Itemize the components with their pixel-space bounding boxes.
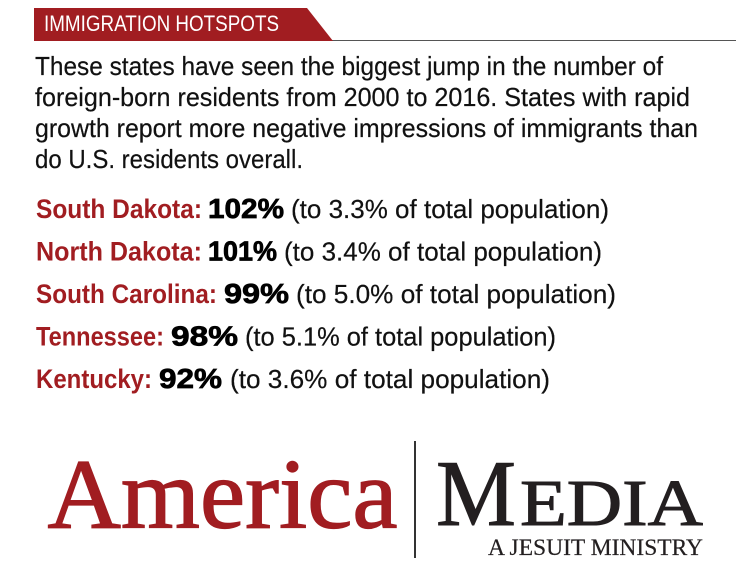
- intro text: foreign-born residents from 2000 to 2016. States with rapid: [35, 82, 690, 112]
- stat: South Dakota: [36, 193, 609, 224]
- stat: South Carolina: [36, 278, 616, 309]
- stat: South Dakota: South Dakota:: [36, 194, 202, 224]
- stat: South Carolina: (to 5.0% of total population): [296, 279, 616, 309]
- stat: South Dakota: 102%: [208, 193, 284, 224]
- stat: Tennessee: 98%: [171, 320, 238, 352]
- logo wordmark: Media: [436, 442, 703, 546]
- stat: South Carolina: 99%: [224, 278, 289, 309]
- intro text: growth report more negative impressions of immigrants than: [35, 113, 698, 143]
- header banner: [34, 8, 333, 41]
- logo wordmark: Media: EDIA: [520, 467, 703, 540]
- stat: Tennessee: Tennessee:: [36, 322, 164, 352]
- stat: North Dakota: 101%: [208, 236, 277, 266]
- logo wordmark: America: America: [48, 438, 398, 550]
- stat: North Dakota: (to 3.4% of total population): [284, 236, 602, 266]
- stat: Kentucky: 92%: [159, 363, 222, 394]
- stat: South Dakota: (to 3.3% of total population): [291, 194, 609, 224]
- stat: Tennessee: [36, 320, 556, 352]
- stat: Kentucky: (to 3.6% of total population): [230, 364, 550, 394]
- intro text: [35, 51, 698, 174]
- stat: Kentucky: [36, 363, 550, 394]
- stat: North Dakota: North Dakota:: [36, 236, 202, 266]
- logo: America Media: [48, 438, 703, 560]
- logo wordmark: Media: M: [436, 442, 516, 546]
- stat: North Dakota: [36, 236, 602, 266]
- stat: Tennessee: (to 5.1% of total population): [245, 322, 556, 352]
- intro text: do U.S. residents overall.: [35, 144, 303, 174]
- logo tagline: A JESUIT MINISTRY: [488, 535, 703, 560]
- intro text: These states have seen the biggest jump in the number of: [35, 51, 664, 81]
- stat: South Carolina: South Carolina:: [36, 279, 217, 309]
- heading: IMMIGRATION HOTSPOTS: [44, 11, 279, 36]
- logo divider: [414, 441, 416, 558]
- stat: Kentucky: Kentucky:: [36, 364, 152, 394]
